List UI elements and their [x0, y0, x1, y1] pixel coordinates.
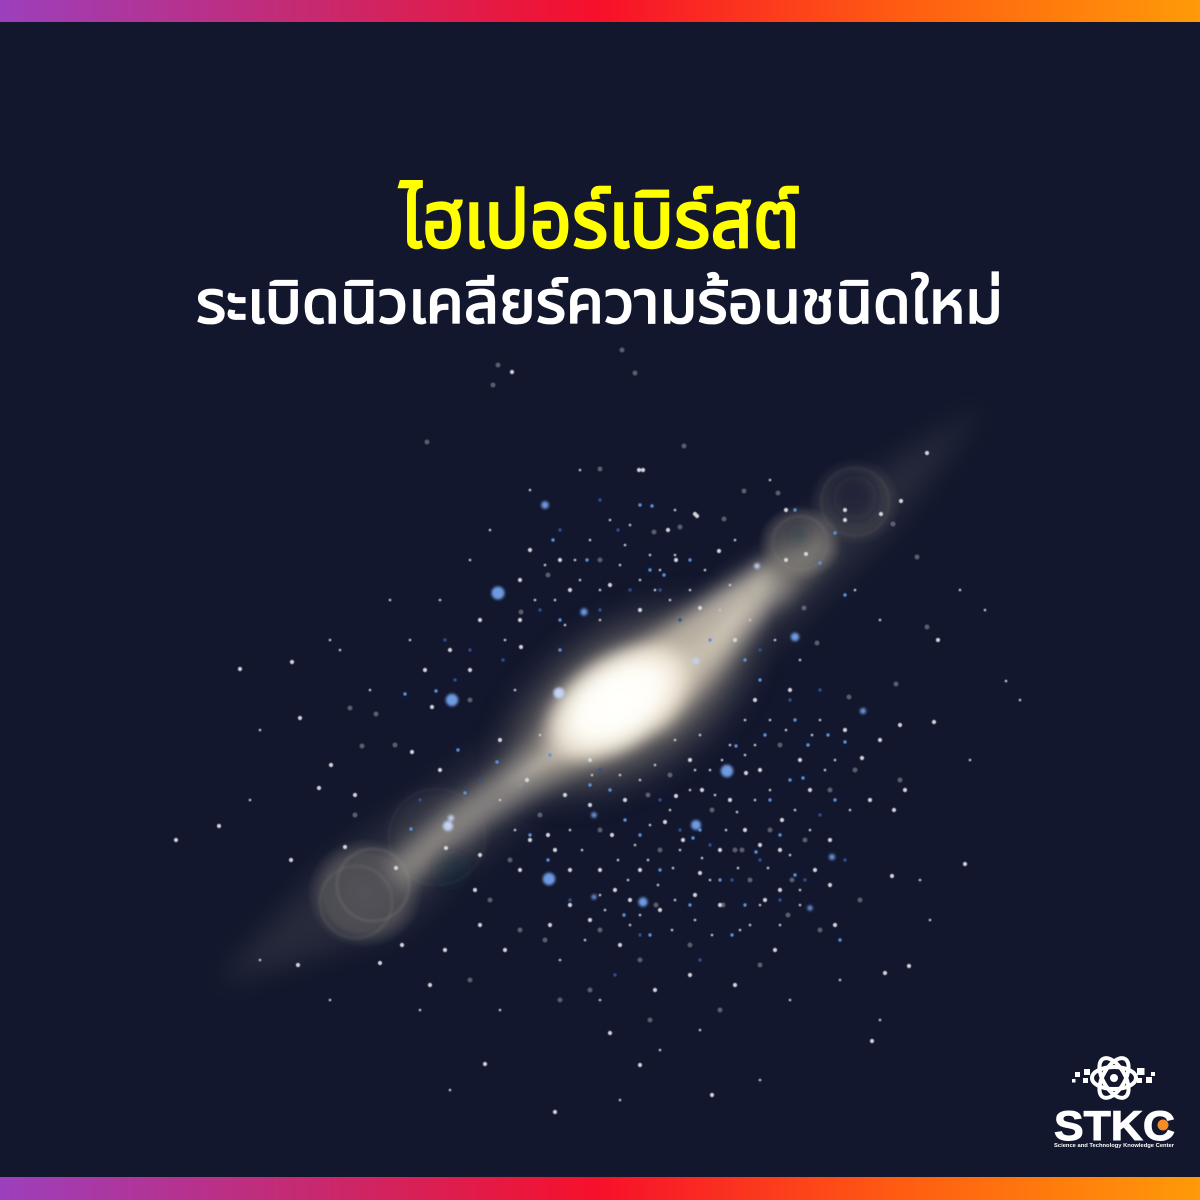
bright blue small stars — [405, 505, 845, 940]
jet bright spine — [500, 600, 750, 790]
lower jet — [385, 690, 640, 890]
middle lower blob glow — [382, 783, 492, 887]
lens rings — [320, 468, 889, 938]
central white core — [514, 609, 722, 795]
far upper blob glow — [809, 458, 901, 546]
dark blue stars — [420, 500, 845, 975]
star field — [176, 350, 1020, 1112]
logo orange dot — [1158, 1120, 1168, 1130]
subtitle: white heading: ระเบิดนิวเคลียร์ความร้อนชนิดใหม่ — [196, 269, 1003, 336]
faint outer jet glow — [215, 405, 985, 985]
bottom gradient bar — [0, 1177, 1200, 1200]
upper jet — [610, 560, 785, 730]
logo tagline: Science and Technology Knowledge Center — [1054, 1143, 1174, 1149]
illustration: hyperburst explosion with jets and lens rings — [215, 405, 985, 985]
logo: STKC — [1054, 1053, 1175, 1149]
pale blue stars over the glow — [443, 563, 760, 831]
upper jet fading end — [760, 525, 835, 610]
bright white small stars — [176, 372, 965, 1112]
large glowing blue stars — [446, 501, 866, 911]
dim grey stars — [350, 350, 927, 1020]
icon: atom — [1072, 1053, 1155, 1103]
upper blob glow — [758, 505, 842, 581]
tiny white stars — [250, 470, 1020, 1100]
top gradient bar — [0, 0, 1200, 22]
dark ring interiors — [432, 476, 877, 890]
logo wordmark: STKC — [1054, 1102, 1175, 1149]
lower blob glow — [307, 838, 423, 948]
title: yellow heading: ไฮเปอร์เบิร์สต์ — [398, 175, 800, 264]
central core halo — [456, 549, 800, 851]
